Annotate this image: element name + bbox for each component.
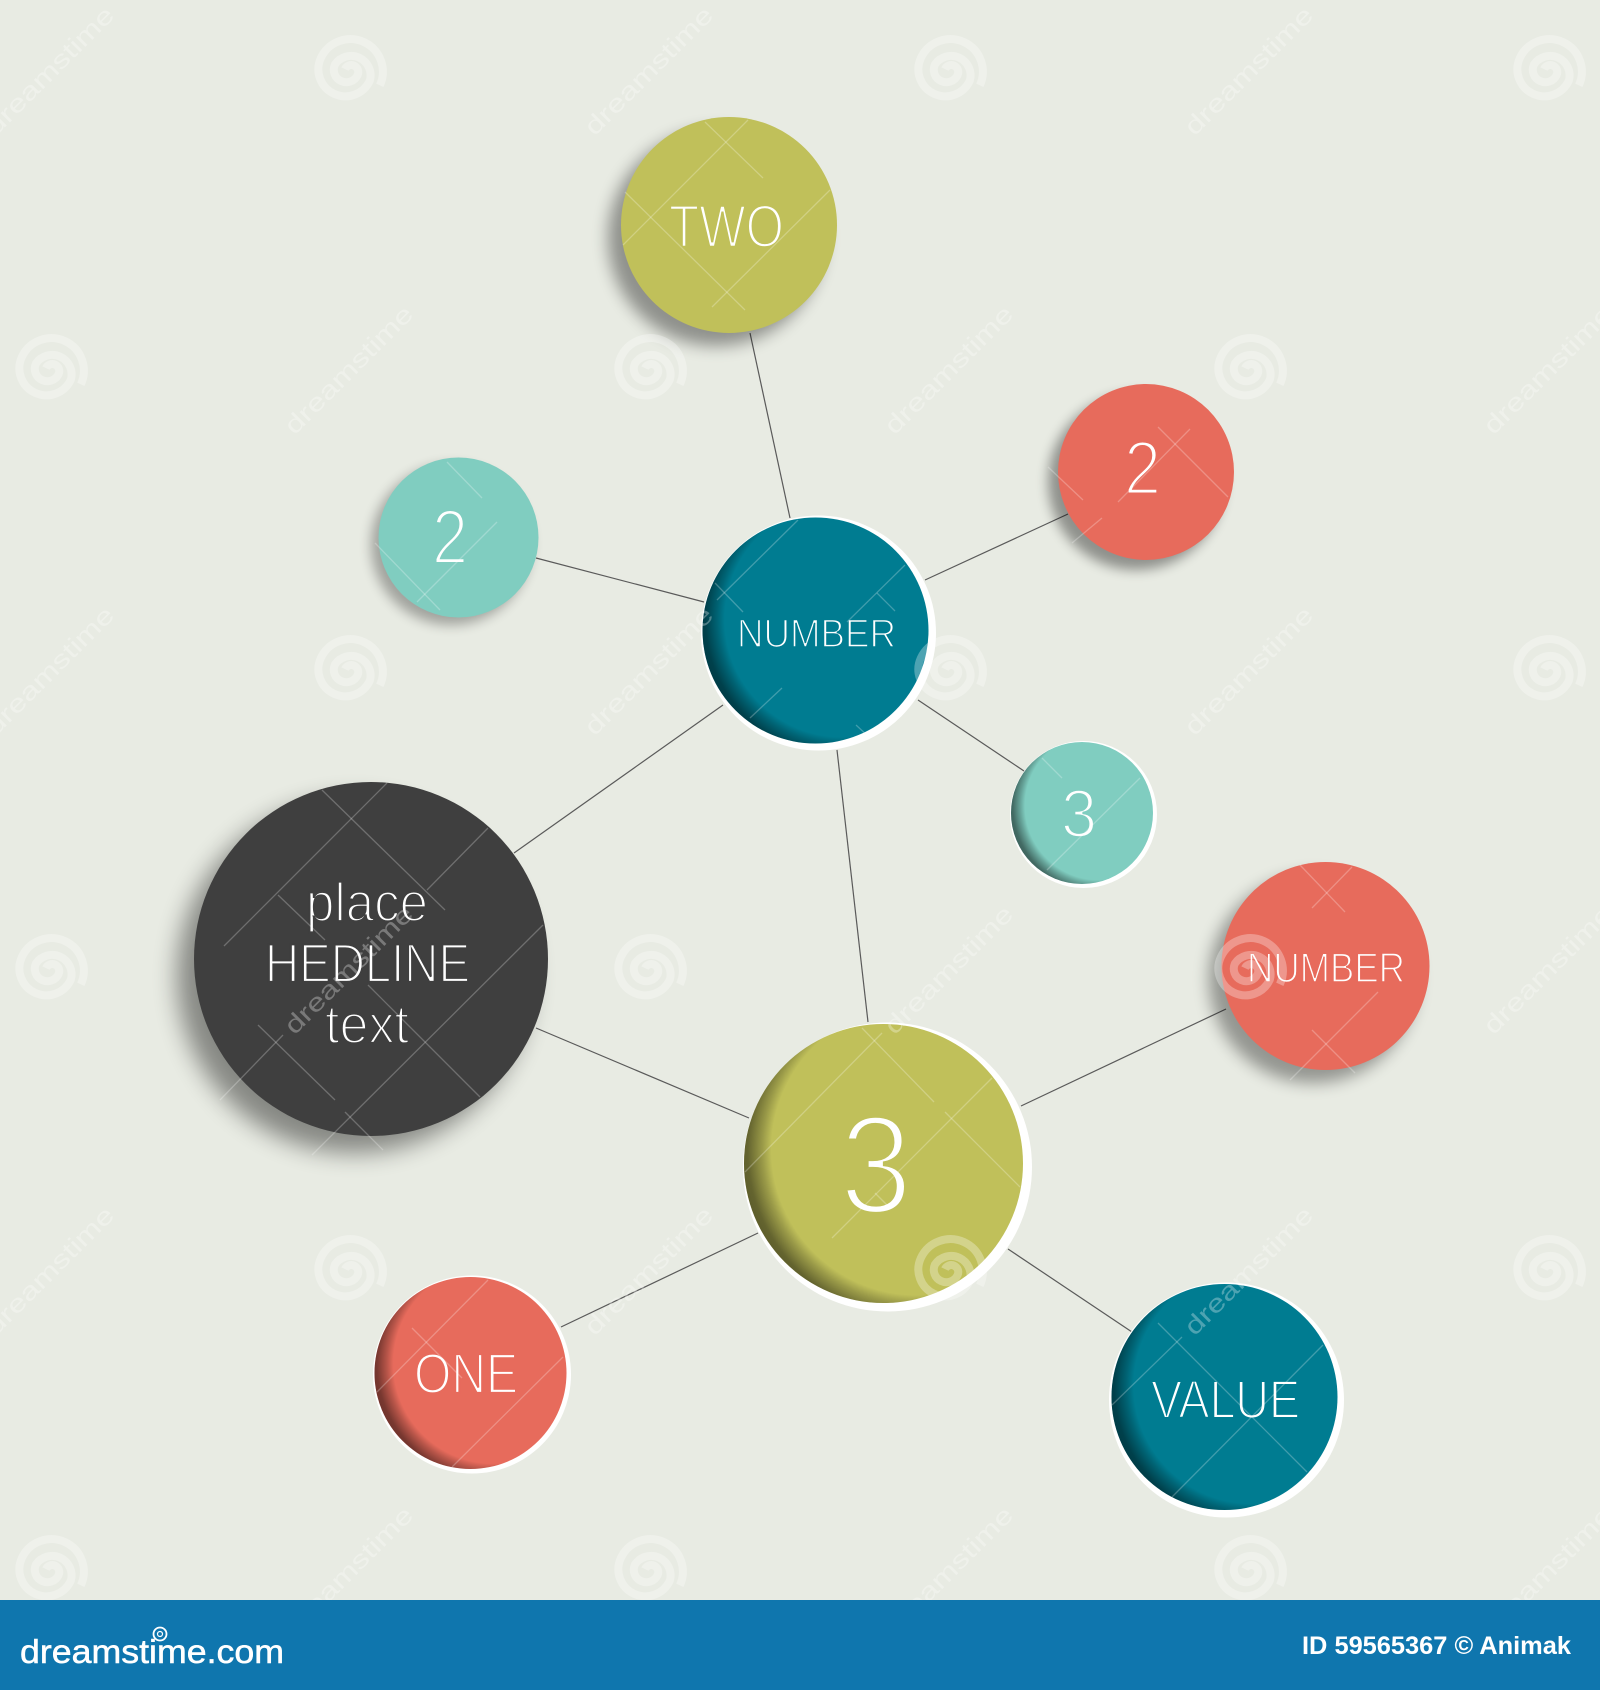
node: teal 3: [1010, 741, 1157, 888]
node: teal 2: [371, 458, 538, 625]
watermark: dreamstime text: dreamstime: [279, 300, 419, 440]
node: teal 3: 3: [1061, 776, 1097, 852]
node: teal NUMBER hub: [701, 516, 936, 750]
node: headline: text: [325, 993, 409, 1055]
watermark: dreamstime text: dreamstime: [279, 1501, 419, 1641]
watermark: dreamstime text: dreamstime: [1478, 900, 1600, 1040]
node: TWO: [608, 117, 837, 346]
node: headline: place: [306, 871, 428, 933]
footer logo: dreamstime.com: [20, 1633, 284, 1670]
footer bar: [0, 1600, 1600, 1690]
watermark: dreamstime text: dreamstime: [579, 1, 719, 141]
watermark: dreamstime text: dreamstime: [1478, 300, 1600, 440]
watermark: dreamstime text: dreamstime: [579, 601, 719, 741]
node: olive 3 hub: [743, 1022, 1032, 1312]
node: red 2: 2: [1124, 426, 1161, 511]
watermark: dreamstime text: dreamstime: [1179, 601, 1319, 741]
watermark: dreamstime text: dreamstime: [279, 900, 419, 1040]
watermark: diagonal lines: [220, 120, 1378, 1497]
watermark: dreamstime text: dreamstime: [579, 1201, 719, 1341]
node: red 2: [1048, 384, 1234, 570]
node: teal 2: 2: [432, 494, 468, 580]
node: headline: [177, 782, 548, 1153]
node: VALUE: VALUE: [1151, 1370, 1300, 1430]
connector lines: [514, 333, 1226, 1332]
watermark: dreamstime text: dreamstime: [879, 900, 1019, 1040]
watermark: dreamstime text: dreamstime: [879, 1501, 1019, 1641]
watermark: dreamstime text: dreamstime: [1179, 1, 1319, 141]
watermark: dreamstime text: dreamstime: [879, 300, 1019, 440]
watermark: dreamstime text: dreamstime: [1478, 1501, 1600, 1641]
node: TWO: TWO: [669, 193, 784, 260]
node: VALUE: [1109, 1282, 1344, 1518]
footer image id: ID 59565367 © Animak: [1302, 1632, 1571, 1660]
watermark: dreamstime text: dreamstime: [1179, 1201, 1319, 1341]
node: olive 3 hub: 3: [840, 1086, 912, 1243]
node: teal NUMBER hub: NUMBER: [737, 612, 896, 656]
node: ONE: [373, 1276, 571, 1474]
node: ONE: ONE: [414, 1342, 518, 1406]
node: headline: HEDLINE: [265, 932, 470, 994]
node: red NUMBER: [1209, 862, 1430, 1083]
node: red NUMBER: NUMBER: [1247, 944, 1405, 991]
